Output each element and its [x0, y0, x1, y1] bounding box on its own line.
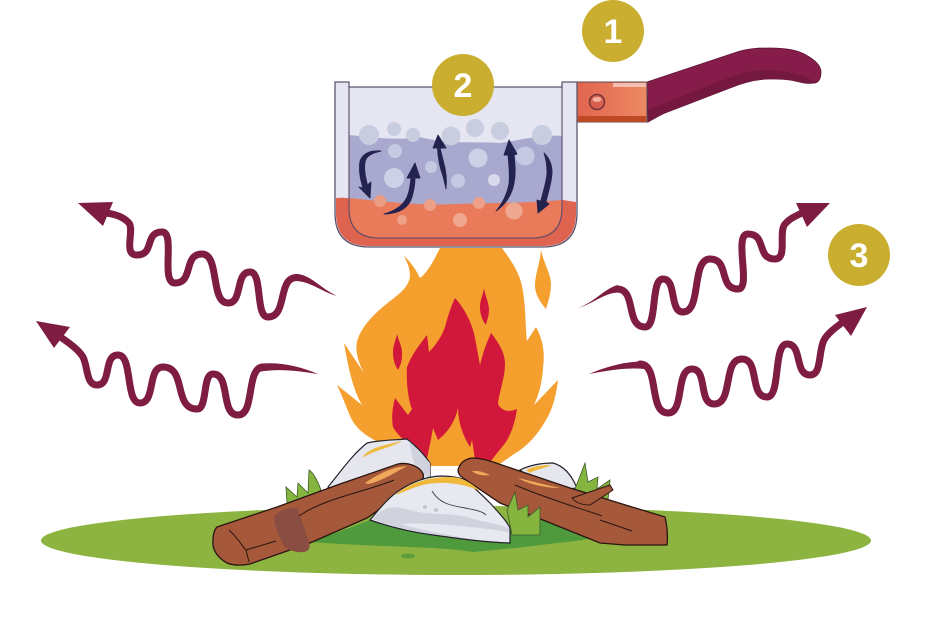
flame: red droplet right [480, 288, 489, 325]
log right [458, 458, 667, 545]
badge 1 [582, 0, 644, 62]
flame: inner red [392, 298, 517, 462]
rock front: crack [432, 491, 486, 515]
badge 3 [828, 224, 890, 286]
fire [337, 248, 558, 466]
log left [213, 463, 423, 565]
radiation wave: upper right [578, 203, 830, 327]
radiation wave: lower left [36, 321, 318, 415]
badge 2: 2 [454, 67, 472, 105]
handle bracket [577, 82, 647, 122]
badge 3: 3 [850, 237, 868, 275]
rock back right [520, 463, 577, 490]
hot layer [349, 198, 562, 238]
pan handle [577, 48, 821, 122]
badge 2 [432, 54, 494, 116]
grass tuft front [507, 492, 540, 535]
flame: red droplet left [393, 334, 402, 370]
bubbles [359, 119, 552, 227]
log right: highlight [472, 471, 560, 488]
log left: grain lines [229, 480, 394, 562]
log right: grain lines [515, 485, 632, 531]
convection arrows [359, 135, 552, 214]
pan lower wall heated [336, 198, 576, 246]
radiation wave: lower right [589, 307, 867, 413]
flame: side droplet [535, 250, 551, 309]
grass tuft right [575, 463, 610, 500]
rock back left [328, 439, 430, 500]
handle grip [647, 48, 821, 122]
pan [335, 82, 577, 247]
rock front: snow-gold edge [395, 477, 480, 495]
ground [41, 506, 871, 575]
rock front: grey shade [372, 507, 509, 542]
log left: highlight [365, 466, 407, 484]
log left: dark band [274, 508, 310, 552]
radiation wave: upper left [78, 202, 337, 317]
pan inner outline [349, 87, 562, 238]
water layer [349, 135, 562, 205]
log right: twig [572, 485, 613, 505]
grass tuft left [286, 470, 321, 505]
flame: inner orange tongue [425, 408, 476, 466]
handle grip shade [647, 70, 816, 122]
rock front [370, 476, 510, 543]
pan outer wall [335, 82, 577, 247]
badge 1: 1 [604, 13, 622, 51]
handle rivet [590, 94, 604, 110]
flame: outer orange [337, 248, 558, 466]
rock front: lower highlight [400, 523, 509, 542]
